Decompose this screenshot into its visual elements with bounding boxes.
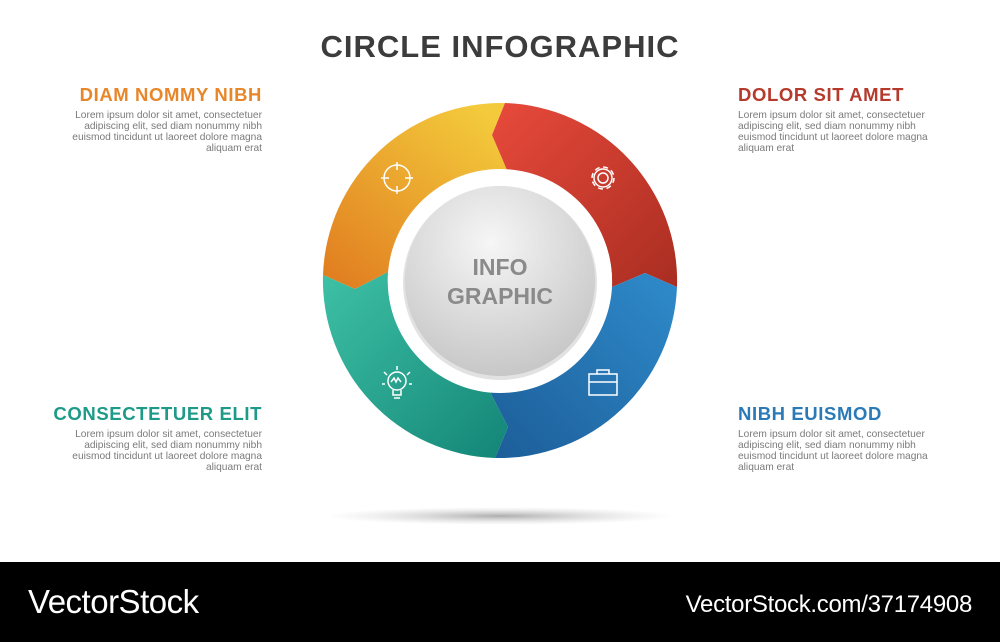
text: nibh euismod: euismod tincidunt ut laoreet dolore magna bbox=[738, 451, 928, 462]
text: nibh euismod: Lorem ipsum dolor sit amet, consectetuer bbox=[738, 429, 925, 440]
text: dolor sit amet: euismod tincidunt ut laoreet dolore magna bbox=[738, 132, 928, 143]
icon: gear bbox=[592, 167, 614, 189]
text: diam nommy nibh: aliquam erat bbox=[206, 143, 262, 154]
text: diam nommy nibh bbox=[72, 84, 262, 154]
text: consectetuer elit: adipiscing elit, sed diam nonummy nibh bbox=[84, 440, 262, 451]
footer bbox=[0, 562, 1000, 642]
shadow bbox=[325, 507, 675, 525]
text: dolor sit amet bbox=[738, 84, 928, 154]
segment: teal bbox=[323, 272, 508, 458]
center ball bbox=[388, 169, 612, 393]
text: consectetuer elit: Lorem ipsum dolor sit amet, consectetuer bbox=[75, 429, 262, 440]
center ball: GRAPHIC bbox=[447, 283, 553, 309]
text: diam nommy nibh: Lorem ipsum dolor sit amet, consectetuer bbox=[75, 110, 262, 121]
text: diam nommy nibh: euismod tincidunt ut laoreet dolore magna bbox=[72, 132, 262, 143]
segment: yellow bbox=[323, 103, 507, 289]
text: consectetuer elit bbox=[53, 403, 262, 473]
text: diam nommy nibh: adipiscing elit, sed diam nonummy nibh bbox=[84, 121, 262, 132]
center ball: INFO bbox=[473, 254, 527, 280]
segment: blue bbox=[490, 273, 677, 458]
footer: VectorStock.com/37174908 bbox=[686, 591, 972, 618]
text: nibh euismod: aliquam erat bbox=[738, 462, 794, 473]
text: consectetuer elit: CONSECTETUER ELIT bbox=[53, 403, 262, 424]
text: dolor sit amet: Lorem ipsum dolor sit amet, consectetuer bbox=[738, 110, 925, 121]
icon: crosshair bbox=[381, 162, 413, 194]
text: nibh euismod: NIBH EUISMOD bbox=[738, 403, 882, 424]
title: CIRCLE INFOGRAPHIC bbox=[320, 29, 680, 64]
text: dolor sit amet: aliquam erat bbox=[738, 143, 794, 154]
icon: briefcase bbox=[589, 370, 617, 395]
icon: bulb bbox=[382, 366, 412, 398]
segment: red bbox=[492, 103, 677, 287]
text: nibh euismod: adipiscing elit, sed diam nonummy nibh bbox=[738, 440, 916, 451]
text: dolor sit amet: DOLOR SIT AMET bbox=[738, 84, 904, 105]
footer: VectorStock bbox=[28, 583, 199, 620]
text: consectetuer elit: aliquam erat bbox=[206, 462, 262, 473]
text: diam nommy nibh: DIAM NOMMY NIBH bbox=[80, 84, 262, 105]
text: dolor sit amet: adipiscing elit, sed diam nonummy nibh bbox=[738, 121, 916, 132]
text: consectetuer elit: euismod tincidunt ut laoreet dolore magna bbox=[72, 451, 262, 462]
text: nibh euismod bbox=[738, 403, 928, 473]
